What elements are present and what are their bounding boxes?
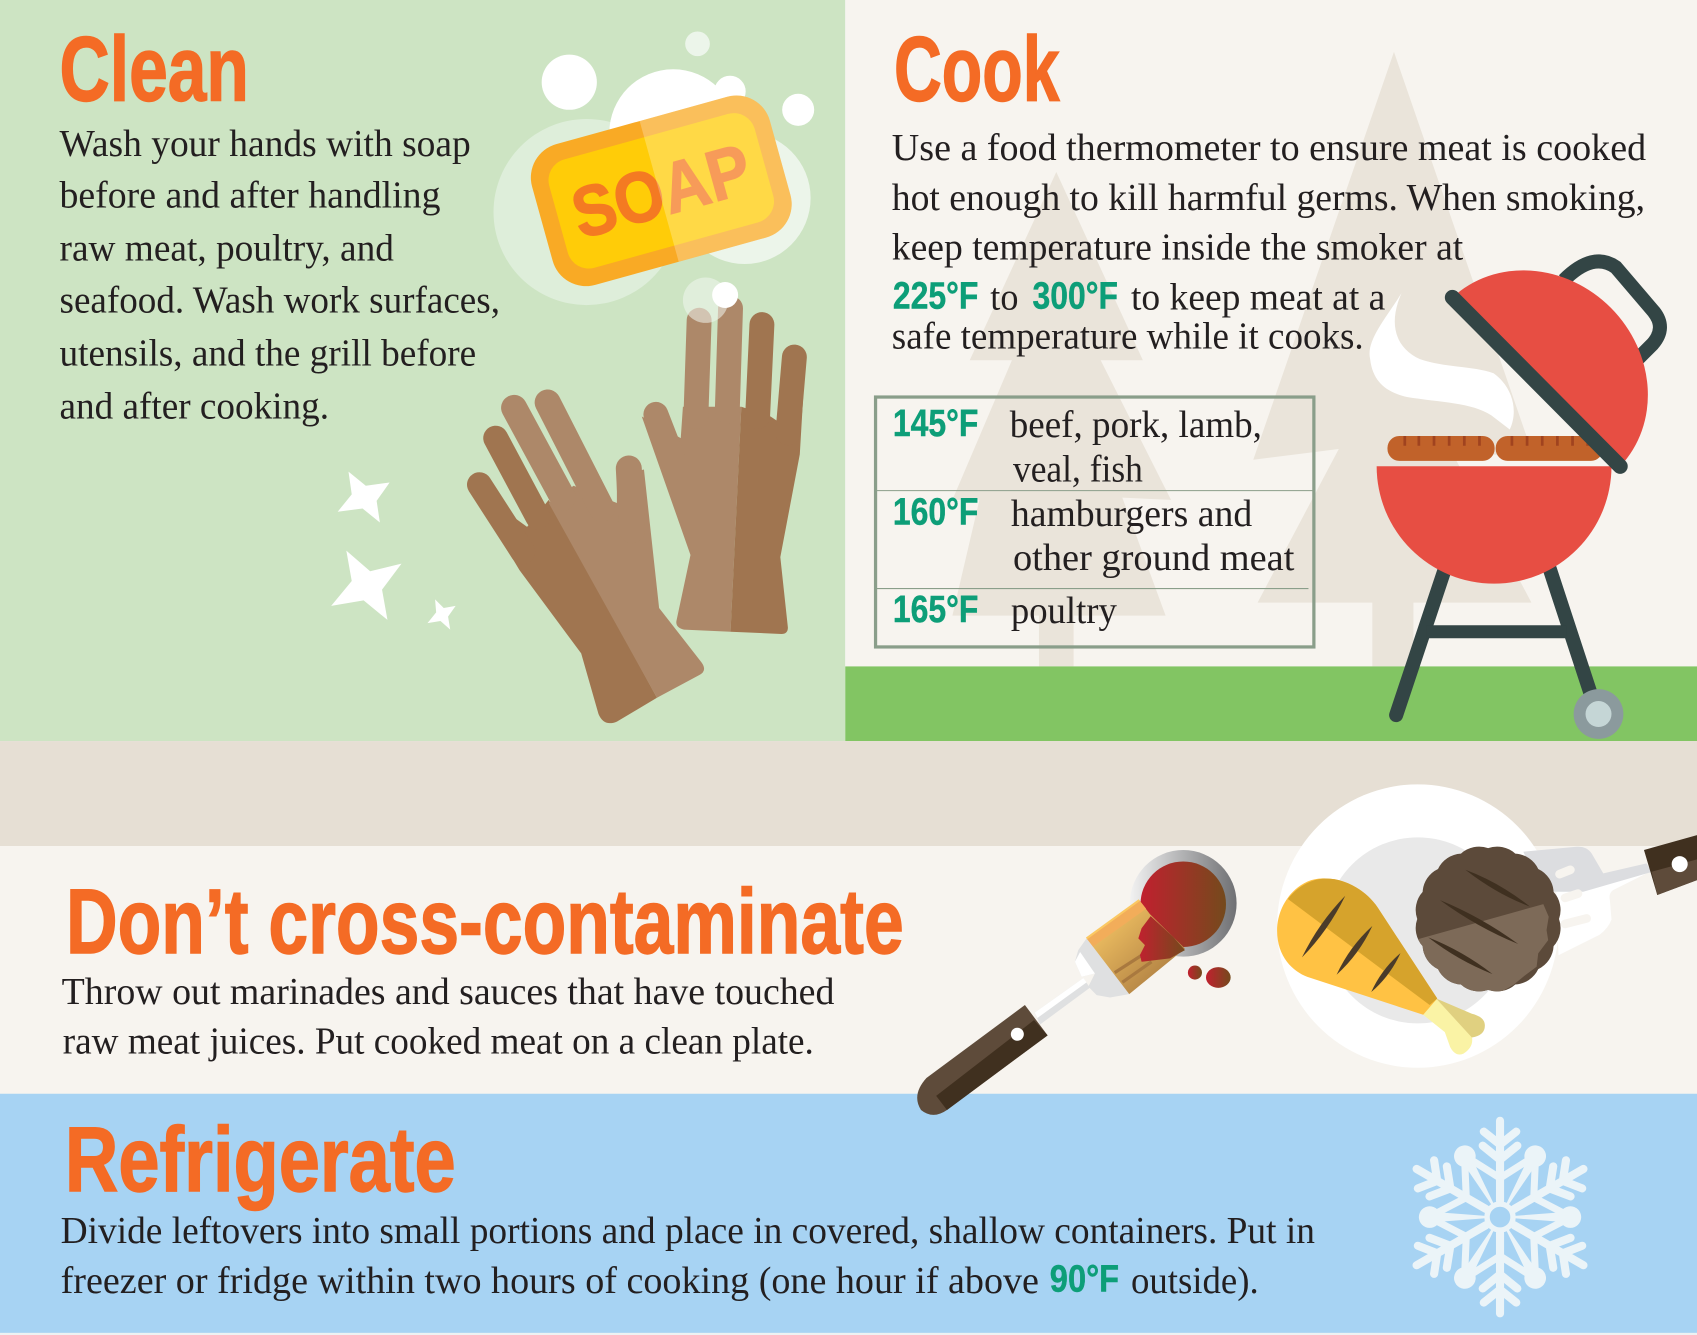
text block: cook instructions: to xyxy=(990,276,1018,318)
grass xyxy=(845,666,1697,741)
smoke xyxy=(1370,293,1514,429)
fork xyxy=(1523,835,1697,955)
grill handle xyxy=(1564,261,1660,360)
row: 145°F: 145°F xyxy=(893,403,978,445)
row: 160°F xyxy=(893,492,1295,579)
text block: cook instructions: hot enough to kill harmful germs. When smoking, xyxy=(892,177,1645,219)
heading: Cook: Cook xyxy=(894,19,1060,121)
grill legs xyxy=(1396,569,1591,715)
text block: clean instructions: before and after handling xyxy=(60,175,441,217)
brush stem xyxy=(1035,978,1090,1025)
heading: Don't cross-contaminate: Don’t cross-contaminate xyxy=(66,871,904,973)
panel: cook xyxy=(845,0,1697,741)
text block: refrigerate instructions xyxy=(61,1210,1315,1302)
sauce drops xyxy=(1188,966,1231,988)
icon: bubbles on glove xyxy=(683,277,738,323)
text block: clean instructions: Wash your hands with soap xyxy=(60,123,471,165)
text block: refrigerate instructions: 90°F xyxy=(1050,1259,1119,1301)
panel: refrigerate xyxy=(0,1094,1697,1333)
sauce bowl xyxy=(1130,850,1237,957)
text block: clean instructions xyxy=(60,123,500,428)
icon: plate with steak and chicken xyxy=(1277,784,1697,1068)
text block: clean instructions: utensils, and the grill before xyxy=(60,333,476,375)
sausages xyxy=(1387,436,1603,461)
brush bristles xyxy=(1087,900,1185,994)
steak xyxy=(1416,846,1561,992)
row: 145°F: beef, pork, lamb, xyxy=(1010,404,1262,446)
text block: clean instructions: and after cooking. xyxy=(60,386,329,428)
text block: cook instructions: 300°F xyxy=(1032,275,1118,317)
text block: clean instructions: raw meat, poultry, and xyxy=(60,228,394,270)
text block: refrigerate instructions: outside). xyxy=(1131,1260,1259,1302)
row: 160°F: 160°F xyxy=(893,492,978,534)
chicken drumstick xyxy=(1277,878,1485,1055)
icon: sparkles xyxy=(331,472,456,630)
icon: soap bar xyxy=(530,96,792,286)
heading: Clean: Clean xyxy=(60,19,249,121)
heading: Refrigerate: Refrigerate xyxy=(65,1109,456,1211)
decorative band xyxy=(0,741,1697,846)
text block: cross-contamination instructions: Throw out marinades and sauces that have touched xyxy=(62,971,834,1013)
text block: refrigerate instructions: Divide leftovers into small portions and place in covered, shallow containers. Put in xyxy=(61,1210,1315,1252)
icon: snowflake xyxy=(1399,1121,1601,1313)
temperature table xyxy=(876,397,1314,647)
text block: cook instructions xyxy=(892,127,1646,357)
icon: left glove xyxy=(468,402,704,723)
brush handle xyxy=(917,1005,1048,1115)
icon: kettle grill xyxy=(1370,261,1660,739)
text block: cook instructions: keep temperature inside the smoker at xyxy=(892,227,1464,269)
row: 160°F: other ground meat xyxy=(1013,537,1295,579)
sauce on brush xyxy=(1138,916,1185,962)
grill bowl xyxy=(1377,466,1612,584)
row: 165°F: 165°F xyxy=(893,589,978,631)
row: 145°F xyxy=(893,403,1262,490)
text block: cross-contamination instructions: raw meat juices. Put cooked meat on a clean plate. xyxy=(63,1021,814,1063)
grill wheel xyxy=(1574,689,1623,739)
text block: cook instructions: to keep meat at a xyxy=(1131,276,1385,318)
icon: soap bar: SOAP xyxy=(563,129,760,255)
brush ferrule xyxy=(1075,938,1129,997)
panel: clean xyxy=(0,0,845,741)
icon: soap bubbles xyxy=(494,31,814,305)
row: 165°F xyxy=(893,589,1117,632)
background trees xyxy=(952,52,1535,666)
row: 160°F: hamburgers and xyxy=(1011,493,1252,535)
row: 145°F: veal, fish xyxy=(1013,448,1143,490)
text block: clean instructions: seafood. Wash work surfaces, xyxy=(60,280,500,322)
icon: right glove xyxy=(642,308,805,634)
grill lid xyxy=(1452,270,1648,466)
plate xyxy=(1277,784,1558,1068)
row: 165°F: poultry xyxy=(1011,590,1117,632)
text block: cook instructions: 225°F xyxy=(893,275,978,317)
text block: refrigerate instructions: freezer or fridge within two hours of cooking (one hour if above xyxy=(61,1260,1039,1302)
text block: cook instructions: safe temperature while it cooks. xyxy=(892,315,1364,357)
text block: cross-contamination instructions xyxy=(62,971,834,1063)
text block: cook instructions: Use a food thermometer to ensure meat is cooked xyxy=(892,127,1646,169)
icon: basting brush and sauce xyxy=(917,850,1237,1115)
panel: don't cross-contaminate xyxy=(0,846,1697,1094)
